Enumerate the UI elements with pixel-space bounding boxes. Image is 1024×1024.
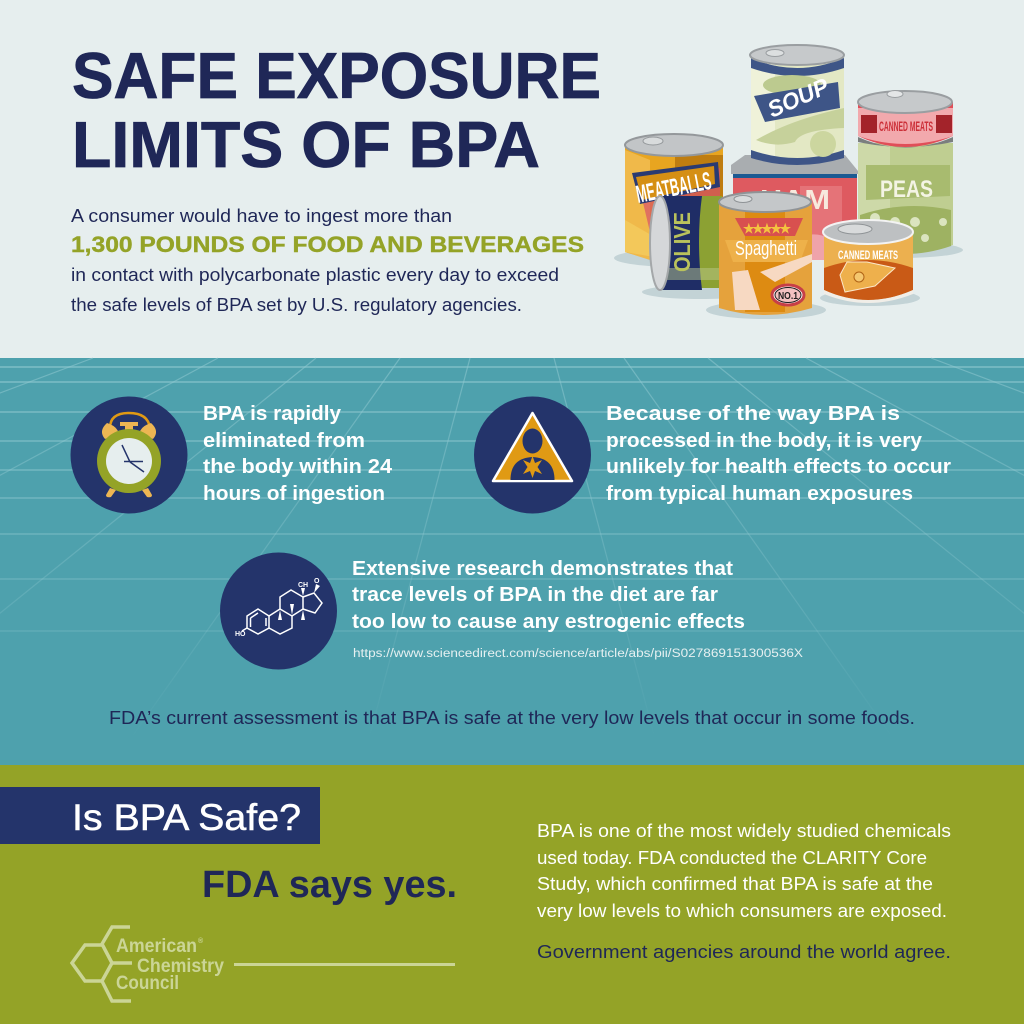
icon: alarm clock — [70, 396, 188, 514]
logo: American Chemistry Council — [72, 927, 455, 1001]
can: ham — [731, 155, 858, 260]
body text block: very low levels to which consumers are exposed. — [537, 901, 947, 921]
title: SAFE EXPOSURE — [72, 39, 601, 112]
fact: health effects — [474, 396, 951, 514]
text: fact three: too low to cause any estrogenic effects — [352, 611, 745, 633]
heading banner — [0, 787, 320, 844]
can: peas — [858, 90, 953, 254]
fact: rapid elimination — [70, 396, 393, 514]
logo: American Chemistry Council: American — [116, 936, 197, 957]
body text block — [537, 821, 951, 962]
title: LIMITS OF BPA — [72, 108, 540, 181]
panel: is BPA safe — [0, 765, 1024, 1024]
can: soup — [750, 45, 844, 165]
intro text block: in contact with polycarbonate plastic every day to exceed — [71, 265, 559, 285]
icon: estradiol molecule: O — [314, 578, 320, 585]
subheading: FDA says yes. — [202, 864, 457, 906]
can: peas: PEAS — [880, 176, 933, 203]
source link: https://www.sciencedirect.com/science/article/abs/pii/S027869151300536X — [353, 648, 803, 660]
body text block: Study, which confirmed that BPA is safe at the — [537, 874, 933, 894]
text: fact three — [352, 558, 803, 660]
text: fact one: hours of ingestion — [203, 483, 385, 505]
icon: warning triangle with person — [474, 396, 591, 514]
text: fact two: unlikely for health effects to occur — [606, 456, 951, 478]
text: fact two: Because of the way BPA is — [606, 403, 900, 425]
body text block: used today. FDA conducted the CLARITY Core — [537, 848, 927, 868]
text: fact two: from typical human exposures — [606, 483, 913, 505]
body text block: Government agencies around the world agree. — [537, 942, 951, 962]
fact: estrogenic effects — [220, 552, 803, 670]
heading banner: Is BPA Safe? — [72, 797, 301, 838]
can: spaghetti: Spaghetti — [735, 238, 797, 260]
text: fact one: the body within 24 — [203, 456, 393, 478]
can: meatballs — [625, 134, 723, 260]
logo: American Chemistry Council: Council — [116, 973, 179, 994]
text: fact three: Extensive research demonstrates that — [352, 558, 733, 580]
intro text block: the safe levels of BPA set by U.S. regulatory agencies. — [71, 295, 522, 315]
intro text block: A consumer would have to ingest more than — [71, 206, 452, 226]
text: fact one: eliminated from — [203, 430, 365, 452]
can: canned meat — [823, 220, 913, 303]
icon: estradiol molecule: CH — [298, 582, 308, 589]
text: fact two: processed in the body, it is very — [606, 430, 923, 452]
can: soup: SOUP — [763, 73, 833, 123]
body text block: BPA is one of the most widely studied chemicals — [537, 821, 951, 841]
panel: header — [71, 39, 963, 319]
logo: American Chemistry Council: ® — [198, 937, 204, 945]
illustration: food cans — [614, 45, 963, 319]
title — [72, 39, 601, 181]
icon: estradiol molecule: HO — [235, 631, 246, 638]
text: fact one — [203, 403, 393, 505]
can: ham: HAM — [760, 184, 830, 215]
can: meatballs: MEATBALLS — [634, 167, 714, 209]
can: spaghetti: NO.1 — [778, 291, 798, 302]
intro text block: 1,300 POUNDS OF FOOD AND BEVERAGES — [71, 232, 584, 257]
can: canned meat: CANNED MEATS — [838, 248, 898, 262]
can shadows — [614, 242, 963, 319]
can: olive: OLIVE — [669, 212, 695, 272]
can: spaghetti: ★★★★★ — [743, 221, 791, 236]
text: fact three: trace levels of BPA in the diet are far — [352, 584, 718, 606]
can: olive — [650, 196, 722, 290]
can: spaghetti — [719, 192, 812, 315]
icon: estradiol molecule — [220, 552, 337, 670]
text: fact two — [606, 403, 951, 505]
panel: key facts — [0, 358, 1024, 765]
text: fact one: BPA is rapidly — [203, 403, 342, 425]
can: peas: CANNED MEATS — [879, 118, 933, 134]
FDA assessment statement: FDA’s current assessment is that BPA is safe at the very low levels that occur in some foods. — [109, 708, 915, 728]
logo: American Chemistry Council: Chemistry — [137, 956, 224, 977]
intro text block — [71, 206, 584, 315]
